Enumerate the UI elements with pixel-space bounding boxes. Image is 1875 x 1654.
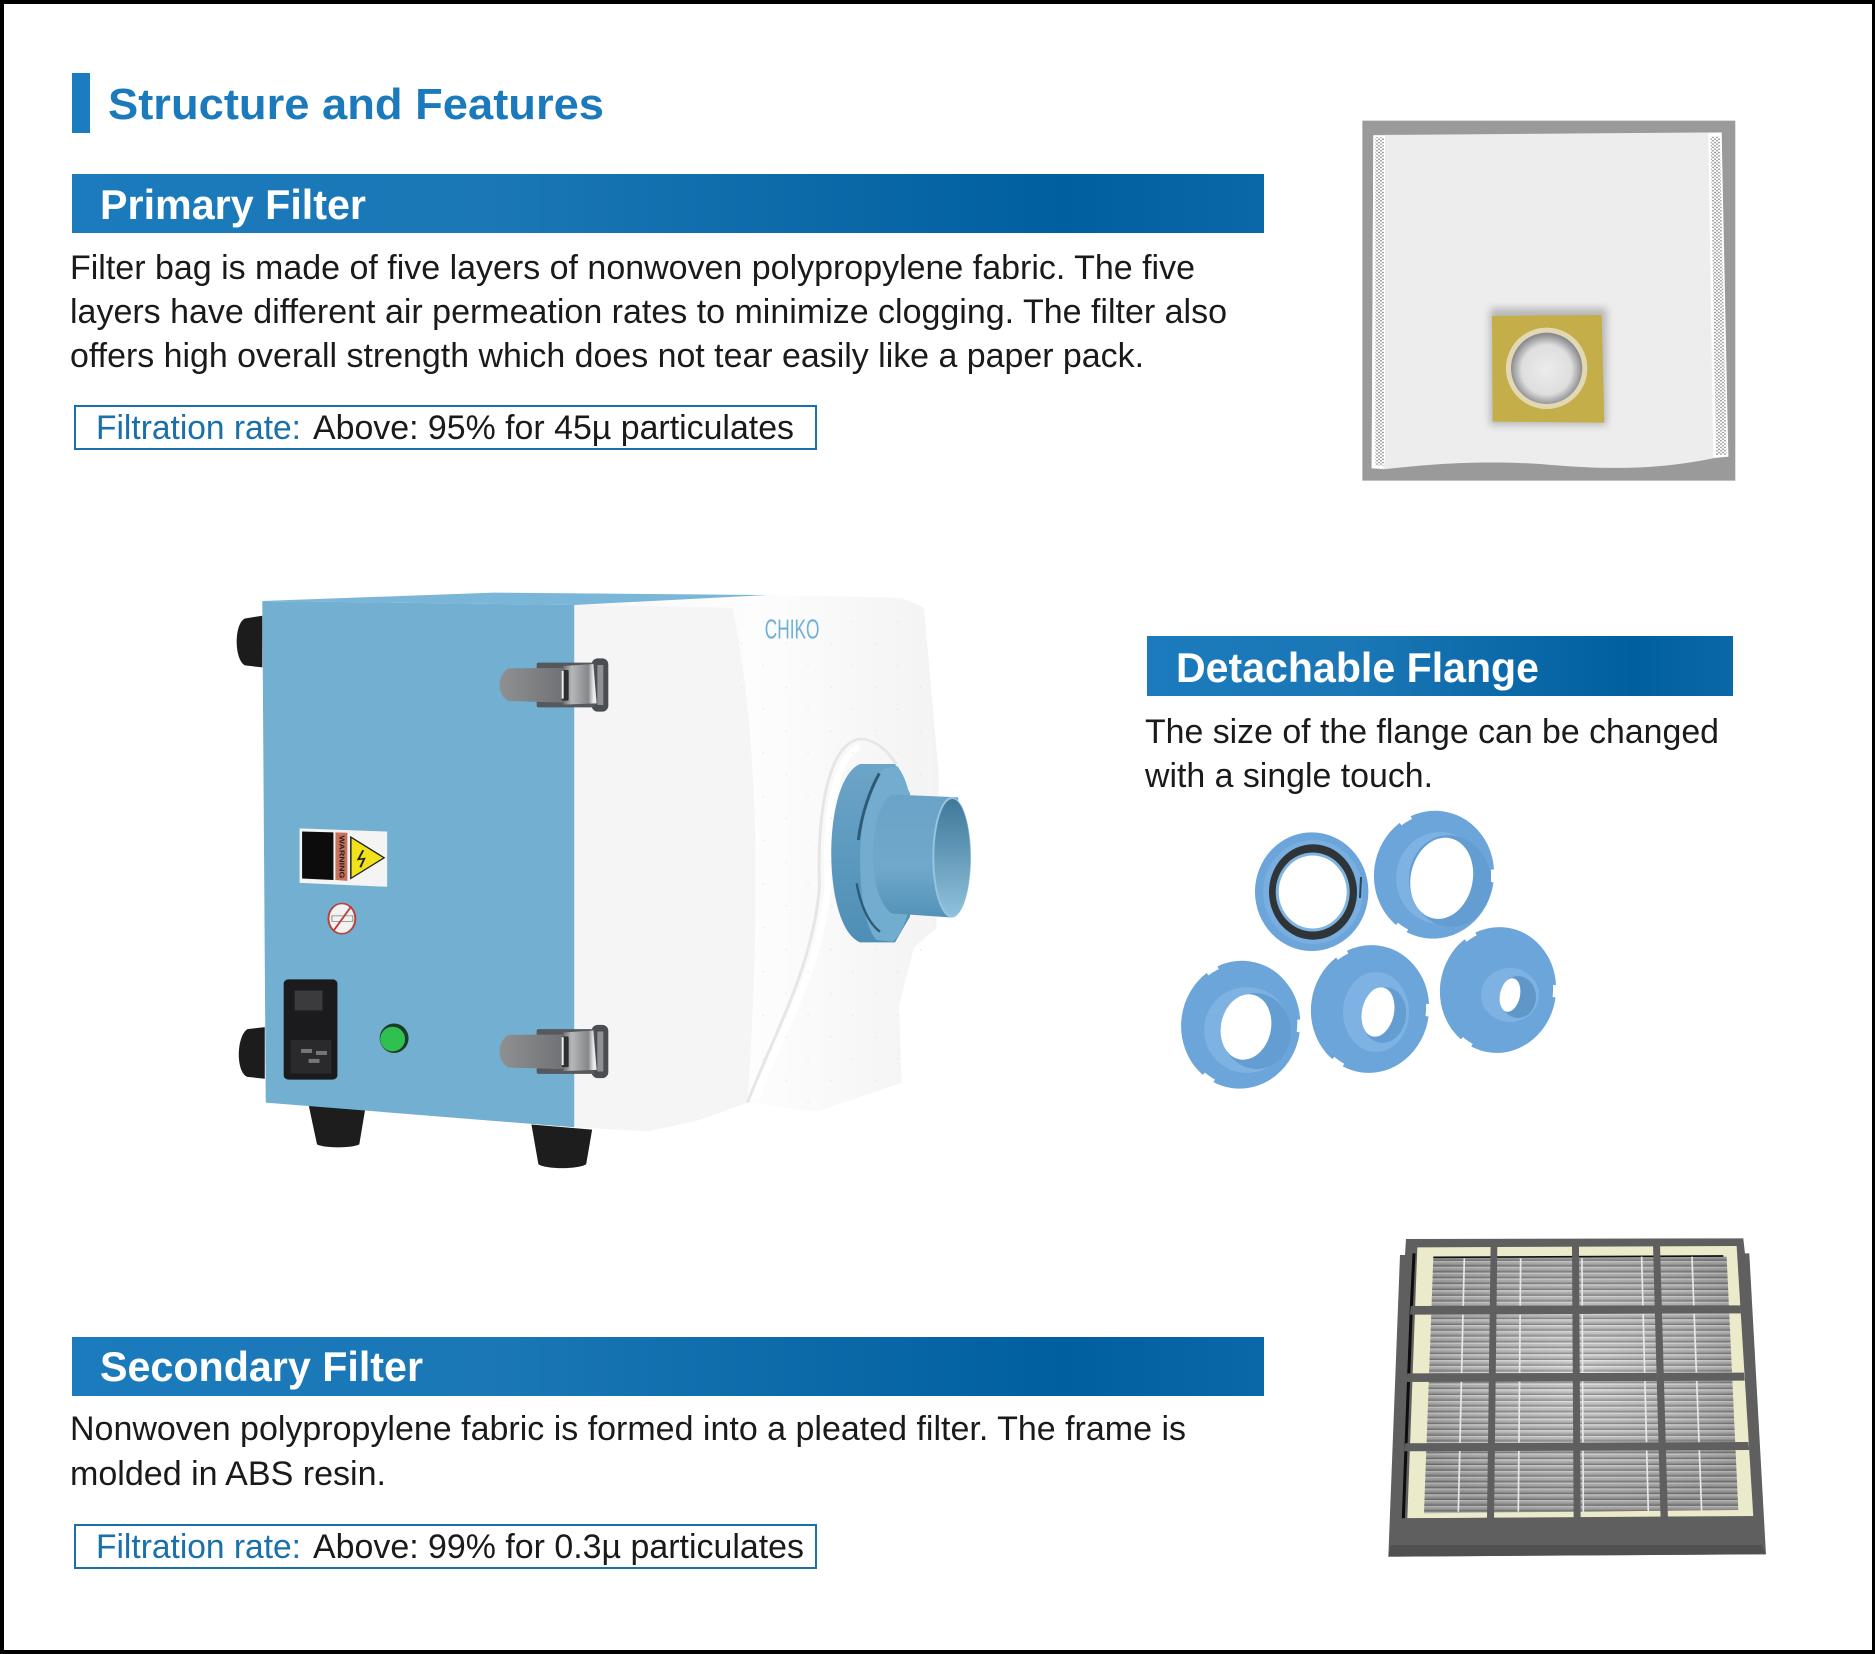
image: dust collector unit: CHIKO xyxy=(765,613,819,645)
text: secondary filter description: Nonwoven polypropylene fabric is formed into a pleated filter. The frame is xyxy=(70,1410,1186,1448)
text: secondary filter description xyxy=(70,1410,1186,1493)
callout: primary filtration rate: Above: 95% for 45µ particulates xyxy=(313,409,794,447)
callout: secondary filtration rate: Above: 99% for 0.3µ particulates xyxy=(313,1528,804,1566)
no-smoking sign xyxy=(328,904,355,934)
text: secondary filter description: molded in ABS resin. xyxy=(70,1455,386,1493)
flange large xyxy=(1369,806,1499,943)
text: flange description: The size of the flange can be changed xyxy=(1145,713,1719,751)
callout: secondary filtration rate xyxy=(75,1525,816,1568)
heading: secondary filter xyxy=(72,1337,1264,1396)
image: filter bag xyxy=(1362,121,1735,481)
title: Structure and Features xyxy=(108,80,604,129)
air inlet flange xyxy=(831,764,971,942)
frame grid xyxy=(1397,1243,1760,1545)
green indicator xyxy=(380,1024,409,1053)
flange with gasket xyxy=(1255,832,1368,951)
heading: primary filter xyxy=(72,174,1264,233)
yellow collar xyxy=(1492,315,1604,423)
text: primary filter description xyxy=(70,249,1227,375)
panel: primary filter xyxy=(70,174,1264,449)
text: primary filter description: layers have different air permeation rates to minimize clogging. The filter also xyxy=(70,293,1227,331)
rear knobs and feet xyxy=(237,616,592,1168)
warning label: WARNING xyxy=(337,836,346,879)
callout: secondary filtration rate: Filtration rate: xyxy=(96,1528,301,1566)
flange medium xyxy=(1306,941,1434,1077)
flange medium large xyxy=(1176,956,1305,1093)
heading: detachable flange xyxy=(1147,636,1733,696)
panel: detachable flange xyxy=(1144,636,1733,1093)
text: flange description xyxy=(1144,713,1719,795)
flange small xyxy=(1435,923,1561,1057)
image: flange set xyxy=(1176,806,1561,1093)
housing xyxy=(262,593,939,1131)
text: flange description: with a single touch. xyxy=(1144,757,1433,795)
warning label xyxy=(300,828,387,887)
callout: primary filtration rate: Filtration rate: xyxy=(96,409,301,447)
latch bottom xyxy=(500,1025,608,1078)
heading: primary filter: Primary Filter xyxy=(100,181,366,228)
image: dust collector unit xyxy=(237,593,939,1168)
callout: primary filtration rate xyxy=(75,406,816,449)
text: primary filter description: Filter bag is made of five layers of nonwoven polypropylene fabric. The five xyxy=(70,249,1195,287)
text: primary filter description: offers high overall strength which does not tear easily like a paper pack. xyxy=(70,337,1144,375)
heading: secondary filter: Secondary Filter xyxy=(100,1343,423,1390)
image: pleated filter xyxy=(1388,1238,1766,1557)
power inlet xyxy=(284,979,337,1080)
white separator threads xyxy=(1458,1257,1702,1512)
panel: secondary filter xyxy=(70,1337,1264,1568)
heading: detachable flange: Detachable Flange xyxy=(1176,644,1539,691)
latch top xyxy=(500,658,608,712)
